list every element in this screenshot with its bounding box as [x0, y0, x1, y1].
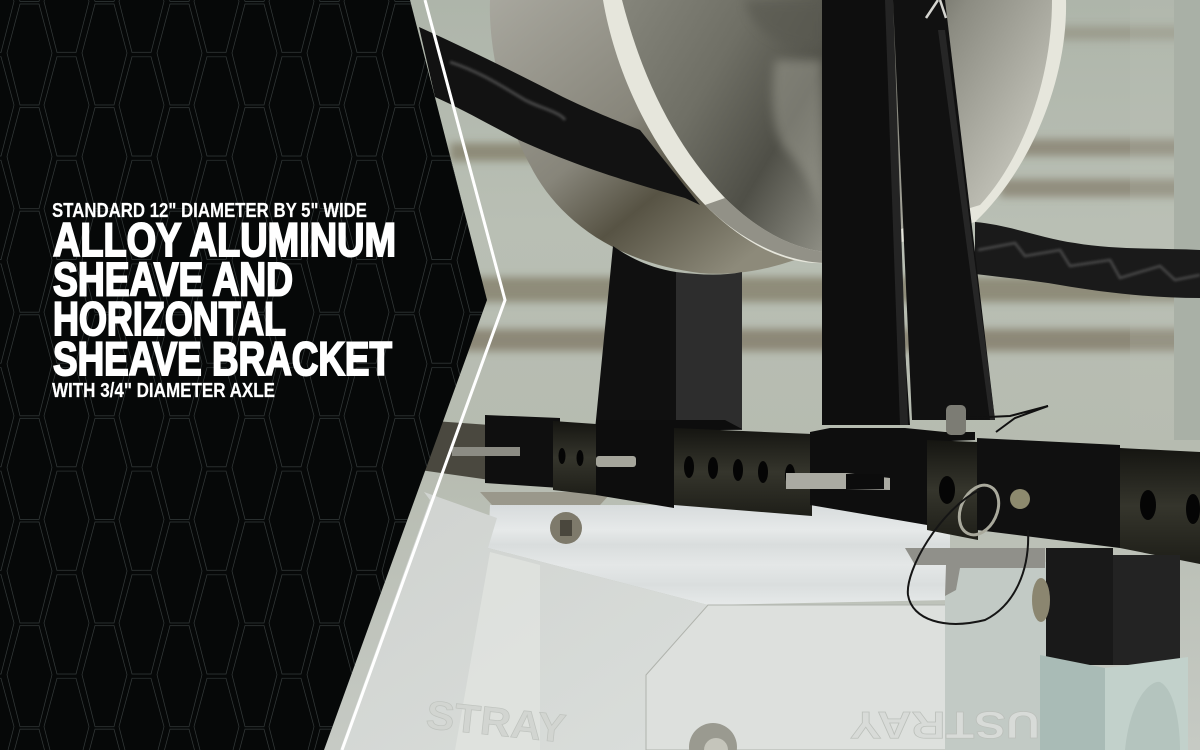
horizontal square tube rail	[420, 375, 1200, 564]
post divider	[885, 0, 908, 425]
aluminium tray panel	[340, 492, 1048, 750]
hexagon pattern	[0, 0, 487, 750]
tray left side	[340, 492, 708, 750]
post right plate	[893, 0, 995, 420]
background wall	[320, 0, 1200, 750]
post lit face	[676, 272, 742, 430]
disc lower bevel	[705, 198, 825, 263]
tray ribbed band	[488, 505, 950, 605]
post faces	[1046, 548, 1113, 665]
mounting lip left	[480, 492, 612, 505]
third collar	[810, 428, 975, 525]
title: SHEAVE AND	[53, 252, 293, 306]
left bracket post	[595, 246, 742, 430]
wire tie	[926, 0, 946, 18]
galvanized sleeve left face	[1040, 655, 1105, 750]
vertical post at right edge	[1174, 0, 1200, 440]
galvanized sleeve right face	[1105, 657, 1188, 750]
blurred wall stripes	[450, 26, 1200, 351]
tray lower plate	[646, 600, 1048, 750]
tube section three	[927, 440, 978, 540]
front sheave disc face	[622, 0, 1052, 252]
screw	[550, 512, 582, 544]
pin right	[786, 473, 890, 490]
ring and bolt	[952, 479, 1006, 541]
far left rail	[420, 420, 490, 480]
hex bolt	[689, 723, 737, 750]
tube section one	[553, 421, 596, 495]
embossed inverted lettering: USTRAY	[850, 703, 1040, 745]
sub caption: WITH 3/4" DIAMETER AXLE	[52, 379, 275, 402]
title	[53, 213, 396, 385]
title: ALLOY ALUMINUM	[53, 213, 396, 266]
metal bracket plate	[945, 562, 1048, 750]
tray vertical highlight	[455, 552, 540, 750]
post dark face	[595, 246, 676, 430]
wire loop	[908, 490, 1028, 624]
centre bracket post	[822, 0, 995, 425]
rear sheave disc	[490, 0, 830, 274]
title: HORIZONTAL	[53, 292, 286, 345]
tube section two	[674, 428, 812, 516]
post left plate	[822, 0, 910, 425]
photo: sheave and bracket assembly	[320, 0, 1200, 750]
rail holes	[558, 448, 1200, 524]
mounting lip right	[905, 548, 1045, 596]
second collar	[596, 375, 742, 508]
embossed tray lettering: STRAY	[424, 693, 568, 750]
fourth collar	[977, 438, 1120, 548]
chevron white outline	[342, 0, 505, 750]
pin centre	[596, 456, 636, 467]
kicker: STANDARD 12" DIAMETER BY 5" WIDE	[52, 199, 367, 222]
panel: black hexagon-pattern chevron	[0, 0, 487, 750]
front sheave disc rim	[603, 0, 1066, 263]
tube section four	[1120, 448, 1200, 564]
top bolt and cotter	[946, 405, 966, 435]
pin left	[452, 447, 520, 456]
text block: product heading	[52, 199, 396, 402]
side bolt	[1032, 578, 1050, 622]
disc hub relief	[772, 60, 822, 225]
panel fill	[0, 0, 487, 750]
first collar	[485, 415, 560, 488]
rope passing behind front disc	[419, 27, 700, 205]
title: SHEAVE BRACKET	[53, 332, 392, 385]
lower post	[908, 490, 1188, 750]
right rope	[975, 222, 1200, 298]
